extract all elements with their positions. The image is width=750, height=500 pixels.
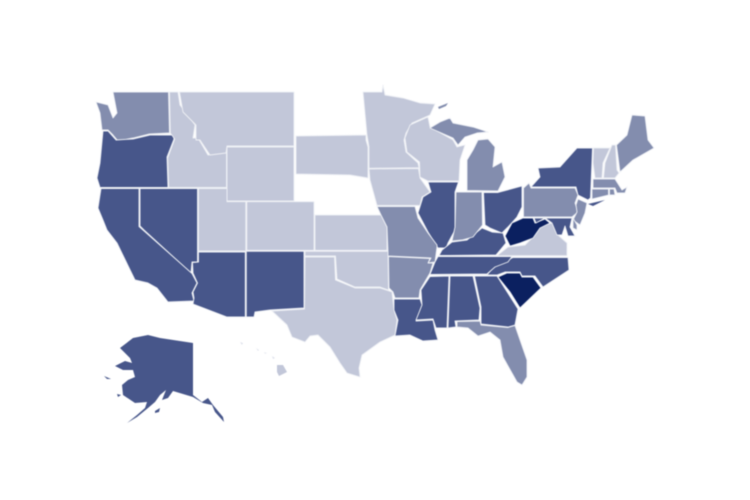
state: Kansas (315, 215, 387, 250)
state: South Dakota (296, 135, 368, 178)
state: Alabama (448, 276, 480, 328)
state: Nevada (140, 188, 198, 273)
state: Florida (457, 321, 527, 385)
state: Montana (180, 92, 294, 155)
state: Arizona (192, 252, 245, 317)
state: Washington (96, 92, 170, 141)
state: Tennessee (430, 256, 512, 274)
state: New Mexico (246, 251, 304, 317)
state: California (98, 188, 197, 302)
state: Maine (616, 115, 654, 172)
state: Utah (198, 188, 246, 251)
state: New York (531, 148, 605, 206)
state: Iowa (369, 168, 430, 206)
state: Vermont (593, 148, 610, 178)
state: Hawaii (240, 342, 287, 376)
state: Georgia (474, 276, 518, 327)
state: Wisconsin (405, 117, 465, 181)
state: Maryland (534, 218, 575, 236)
state: Missouri (377, 206, 437, 263)
state: Virginia (497, 223, 567, 256)
state: Connecticut (592, 189, 608, 199)
state: Colorado (247, 202, 314, 250)
state: Mississippi (416, 276, 449, 328)
state: Michigan (430, 103, 505, 191)
state: Texas (272, 257, 397, 377)
state: Massachusetts (593, 179, 627, 193)
state: Oklahoma (305, 251, 388, 290)
state: Alaska (104, 335, 224, 423)
state: Pennsylvania (524, 183, 578, 217)
state: New Hampshire (604, 145, 619, 178)
state: Oregon (97, 131, 174, 188)
state: Arkansas (388, 256, 433, 298)
state: Wyoming (227, 147, 294, 201)
state: Rhode Island (610, 189, 615, 195)
state: North Carolina (487, 258, 569, 287)
state: New Jersey (573, 199, 587, 225)
state: Minnesota (363, 85, 435, 168)
state: West Virginia (505, 218, 550, 246)
state: Indiana (452, 192, 482, 241)
state: Louisiana (394, 299, 438, 341)
state: Kentucky (439, 228, 506, 256)
state: Idaho (168, 92, 226, 188)
state: South Carolina (498, 273, 541, 308)
state: Delaware (573, 218, 577, 230)
state: Illinois (418, 182, 458, 248)
state: Ohio (484, 186, 522, 233)
